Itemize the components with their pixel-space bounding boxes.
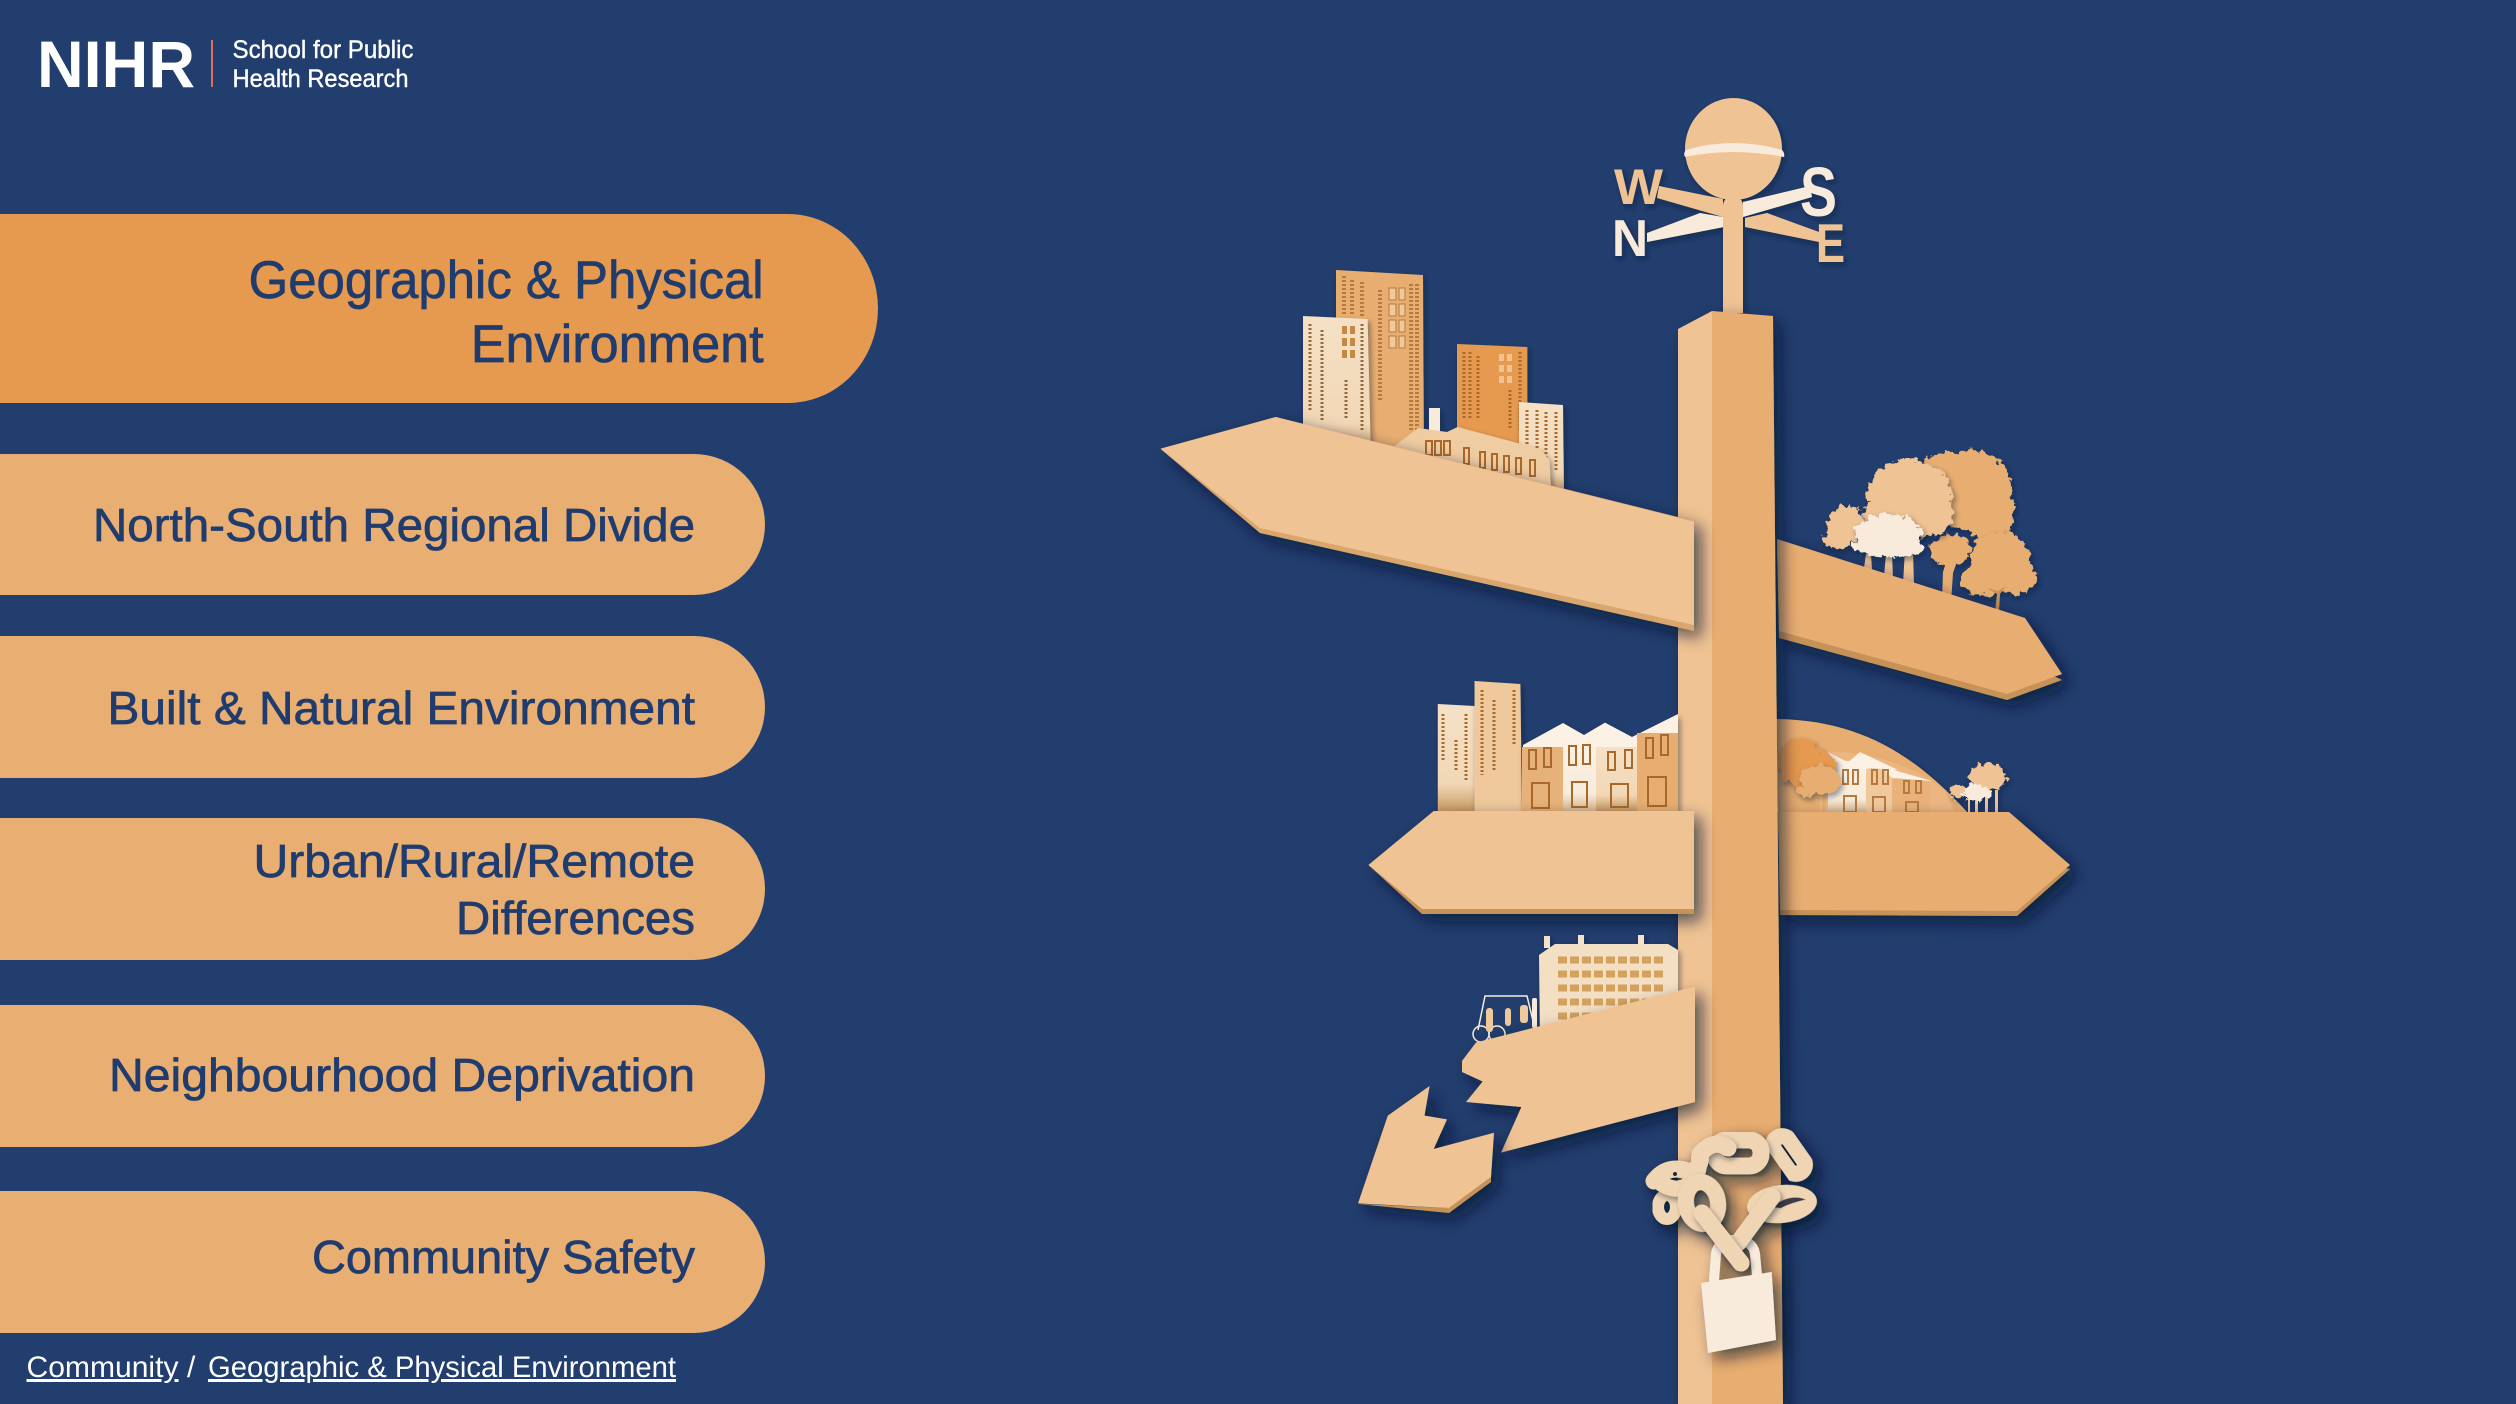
breadcrumb navigation: / — [187, 1351, 196, 1384]
tree: light — [1863, 460, 1953, 537]
post right face — [1712, 311, 1783, 1404]
chain bar: left — [1702, 1213, 1741, 1263]
padlock body — [1701, 1272, 1776, 1353]
tree: lower right — [1960, 532, 2037, 596]
logo: NIHR School for Public Health Research: Health Research — [232, 65, 408, 93]
panel: Urban/Rural/Remote Differences: Urban/Rural/Remote — [254, 835, 695, 887]
chain link: left twisted — [1654, 1144, 1728, 1189]
panel: Geographic & Physical Environment: Geographic & Physical — [249, 251, 764, 310]
low-rise building with chimney — [1393, 408, 1551, 490]
trunks of hill trees — [1786, 787, 1826, 812]
tree: orange — [1796, 765, 1840, 796]
sign: middle left arrow — [1368, 811, 1694, 914]
breadcrumb navigation: Community — [26, 1351, 178, 1384]
scene: terraced houses and towers on middle left sign — [1438, 681, 1678, 811]
signpost — [1678, 311, 1783, 1404]
tower: front — [1474, 681, 1522, 811]
panel: Community Safety — [0, 1191, 765, 1333]
tower: dark orange right — [1457, 344, 1527, 460]
houses — [1828, 752, 1932, 812]
lower right trunk — [1987, 586, 2006, 612]
large tree trunk — [1942, 544, 1962, 603]
house 2 — [1563, 741, 1601, 811]
panel: Urban/Rural/Remote Differences — [0, 818, 765, 960]
chain link: top ring — [1715, 1140, 1761, 1166]
tree: white — [1852, 514, 1924, 557]
chain link: right ring — [1745, 1181, 1819, 1227]
panel: North-South Regional Divide: North-South Regional Divide — [93, 499, 695, 551]
panel: Geographic & Physical Environment: Environment — [471, 315, 764, 374]
panel: Neighbourhood Deprivation: Neighbourhood Deprivation — [109, 1049, 695, 1101]
playground swings and cyclist — [1473, 996, 1537, 1042]
padlock shackle — [1714, 1240, 1757, 1280]
icon: chain and padlock — [1654, 1133, 1819, 1353]
scene: city towers on upper left sign — [1303, 270, 1564, 495]
letter W: W — [1614, 159, 1664, 215]
tree: dark orange — [1778, 738, 1836, 786]
inner hill — [1820, 752, 1955, 812]
tree: small left — [1824, 505, 1864, 549]
panel: Built & Natural Environment: Built & Natural Environment — [108, 682, 695, 734]
vane ball band — [1684, 143, 1784, 157]
house 3 — [1596, 747, 1638, 811]
roofs — [1523, 714, 1678, 760]
house 1 — [1522, 747, 1563, 811]
panel: Community Safety: Community Safety — [312, 1231, 695, 1283]
vane arm: north — [1647, 213, 1724, 242]
sign: broken arrow tip — [1358, 1086, 1494, 1213]
vane arm: south — [1743, 186, 1812, 217]
breadcrumb navigation: Geographic & Physical Environment — [208, 1351, 677, 1384]
panel: North-South Regional Divide — [0, 454, 765, 595]
icon: weather vane — [1612, 98, 1845, 313]
tower: tall orange — [1336, 270, 1424, 470]
sign: upper right arrow — [1777, 539, 2062, 700]
tower: rear — [1438, 704, 1474, 811]
logo: NIHR School for Public Health Research: School for Public — [232, 36, 414, 64]
chain link: far right upper — [1770, 1133, 1808, 1177]
tower: cream right — [1519, 402, 1564, 495]
panel: Built & Natural Environment — [0, 636, 765, 778]
scene: hill with houses on right sign — [1776, 719, 2006, 812]
small trees group — [1950, 763, 2006, 812]
apartment block — [1539, 935, 1678, 1040]
sign: middle right arrow — [1778, 812, 2070, 916]
panel: Neighbourhood Deprivation — [0, 1005, 765, 1147]
letter N: N — [1612, 210, 1648, 268]
trunks of pale trees — [1864, 549, 1914, 587]
letter S: S — [1800, 153, 1837, 231]
chain link: far left — [1658, 1195, 1676, 1219]
vane arm: east — [1745, 213, 1819, 242]
panel: Geographic & Physical Environment — [0, 214, 878, 403]
house 4 — [1637, 733, 1678, 811]
tree: large orange — [1917, 450, 2014, 566]
chain bar: right — [1738, 1197, 1772, 1243]
post left face — [1678, 311, 1712, 1404]
letter E: E — [1816, 212, 1845, 274]
sign: broken left arrow — [1462, 986, 1695, 1153]
vane ball — [1685, 98, 1782, 200]
logo: NIHR School for Public Health Research — [37, 27, 414, 101]
vane arm: west — [1657, 186, 1723, 217]
vane stem — [1723, 196, 1743, 313]
logo: NIHR School for Public Health Research: NIHR — [37, 27, 195, 101]
scene: apartment block and playground on broken sign — [1473, 935, 1678, 1042]
scene: trees on right sign — [1824, 450, 2037, 612]
tower: cream left — [1303, 316, 1371, 460]
hill — [1776, 719, 1967, 812]
chain link: lower left ring — [1683, 1180, 1721, 1226]
terraced houses — [1522, 714, 1678, 811]
sign: upper left arrow — [1161, 417, 1694, 631]
panel: Urban/Rural/Remote Differences: Differences — [456, 892, 695, 944]
